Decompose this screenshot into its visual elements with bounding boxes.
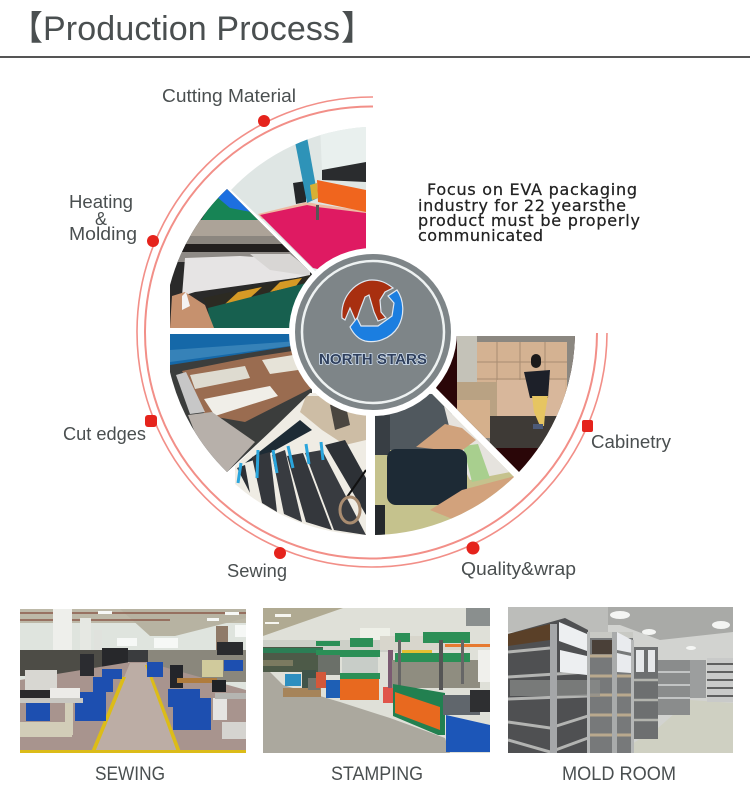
- title: Production Process: [43, 10, 340, 48]
- title: 】: [341, 10, 375, 48]
- marker dots: [145, 115, 593, 559]
- photo wedge: cabinetry: [436, 336, 575, 472]
- title: 【: [9, 10, 43, 48]
- focus statement: [418, 180, 640, 245]
- left machines band: [20, 650, 102, 676]
- focus statement: industry for 22 yearsthe: [418, 196, 626, 215]
- photo captions: [95, 764, 676, 785]
- photo wedge: sewing: [235, 393, 366, 535]
- step labels: Quality&wrap: [461, 559, 576, 579]
- step labels: Heating: [69, 192, 133, 212]
- photo captions: STAMPING: [331, 764, 423, 785]
- step labels: Cut edges: [63, 424, 146, 444]
- photo captions: MOLD ROOM: [562, 764, 676, 785]
- step labels: Cabinetry: [591, 432, 671, 452]
- focus statement: communicated: [418, 226, 543, 245]
- logo badge: [289, 248, 457, 416]
- far shelves: [658, 660, 690, 715]
- step labels: &: [95, 209, 107, 229]
- photo: mold room: [508, 607, 733, 753]
- photo captions: SEWING: [95, 764, 165, 785]
- photo: sewing floor: [20, 609, 246, 753]
- step labels: Molding: [69, 224, 137, 244]
- shelf 1: [508, 618, 588, 753]
- outer ring arcs: [137, 97, 607, 567]
- focus statement: product must be properly: [418, 211, 640, 230]
- photo wedge: quality and wrap: [375, 394, 514, 535]
- step labels: [63, 86, 671, 581]
- shelf 3: [633, 647, 658, 739]
- step labels: Cutting Material: [162, 86, 296, 106]
- middle presses: [316, 641, 340, 646]
- photo wedge: heating and molding: [165, 185, 315, 330]
- logo mark: [342, 280, 403, 342]
- blue crates: [26, 660, 243, 730]
- photo wedge: cutting material: [231, 127, 366, 271]
- title rule: [0, 56, 750, 58]
- photo wedge: cut edges: [165, 334, 315, 474]
- focus statement: Focus on EVA packaging: [427, 180, 637, 199]
- photo: stamping floor: [263, 608, 490, 753]
- logo wordmark: NORTH STARS: [319, 351, 427, 368]
- front press: [392, 660, 480, 688]
- step labels: Sewing: [227, 561, 287, 581]
- shelf 2: [590, 632, 633, 753]
